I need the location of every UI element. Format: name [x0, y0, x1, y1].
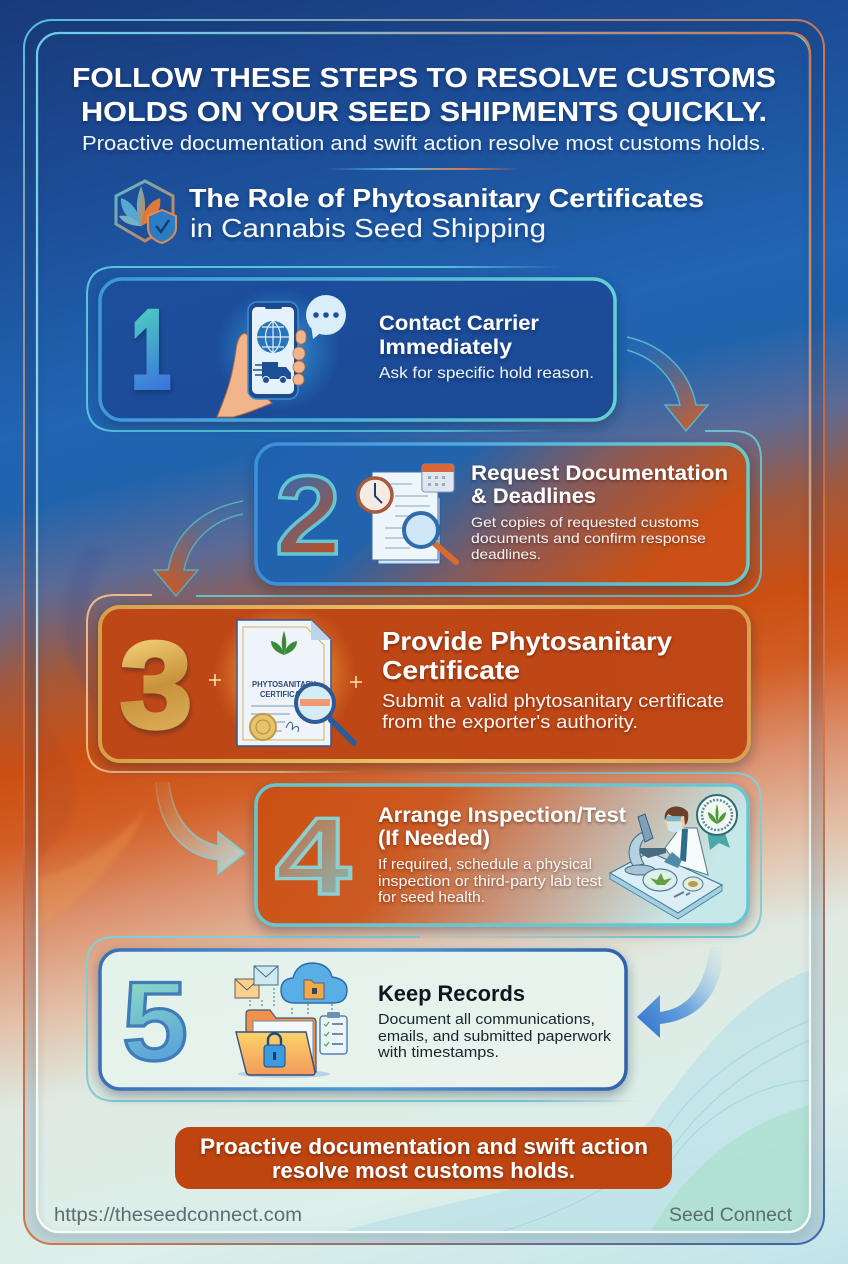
icon: certificate with magnifier: PHYTOSANITARY — [252, 680, 317, 689]
number 1: 1 — [131, 287, 171, 412]
step 2 text: Request Documentation — [471, 462, 728, 485]
step 4 text — [378, 804, 626, 906]
step 4 text: for seed health. — [378, 890, 485, 906]
step 1 — [100, 279, 615, 420]
section heading: in Cannabis Seed Shipping — [190, 213, 546, 243]
step 2 text: documents and confirm response — [471, 530, 706, 546]
section heading: The Role of Phytosanitary Certificates — [189, 183, 704, 213]
arrow: step 4 to 5 — [637, 947, 722, 1038]
callout — [175, 1127, 672, 1189]
callout: resolve most customs holds. — [272, 1158, 575, 1183]
arrow: step 2 to 3 — [154, 501, 243, 596]
step 5 text: Keep Records — [378, 981, 525, 1006]
step 3 text: Certificate — [382, 655, 520, 685]
step 1 text: Immediately — [379, 336, 512, 359]
arrow: step 1 to 2 — [627, 337, 708, 431]
card 3 — [100, 607, 749, 761]
background waves — [38, 545, 810, 1232]
step 3 text — [382, 626, 724, 732]
icon: certificate with magnifier — [209, 603, 362, 747]
title: FOLLOW THESE STEPS TO RESOLVE CUSTOMS — [72, 62, 776, 93]
step 5 — [100, 950, 626, 1089]
subtitle: Proactive documentation and swift action resolve most customs holds. — [82, 133, 766, 155]
step 5 text: Document all communications, — [378, 1012, 595, 1028]
icon: lab scientist — [610, 795, 737, 919]
callout: Proactive documentation and swift action — [200, 1134, 648, 1159]
step 5 text: emails, and submitted paperwork — [378, 1029, 612, 1045]
step 4 text: inspection or third-party lab test — [378, 874, 602, 890]
step 2 text — [471, 462, 728, 562]
footer url: https://theseedconnect.com — [54, 1205, 302, 1226]
step 4 text: Arrange Inspection/Test — [378, 804, 626, 827]
step 2 text: Get copies of requested customs — [471, 514, 699, 530]
number 5: 5 — [122, 959, 188, 1084]
step 3 — [100, 603, 749, 761]
number 4: 4 — [275, 795, 351, 918]
step 3 text: Provide Phytosanitary — [382, 626, 673, 656]
step 3 text: from the exporter's authority. — [382, 712, 638, 732]
icon: shield with leaf — [116, 181, 176, 243]
card 4 — [256, 785, 748, 925]
step 4 text: (If Needed) — [378, 827, 490, 850]
step outlines — [87, 267, 761, 1101]
step 2 text: & Deadlines — [471, 485, 596, 508]
step 2 text: deadlines. — [471, 546, 541, 562]
icon: certificate with magnifier: CERTIFICATE — [260, 690, 310, 699]
card 1 — [100, 279, 615, 420]
step 1 text — [379, 312, 594, 382]
step 1 text: Contact Carrier — [379, 312, 539, 335]
icon: documents, clock, calendar, magnifier — [358, 464, 456, 564]
card 2 — [256, 444, 748, 584]
step 5 text — [377, 981, 612, 1061]
number 2: 2 — [275, 453, 341, 578]
step 3 text: Submit a valid phytosanitary certificate — [382, 691, 724, 711]
step 2 — [256, 444, 748, 584]
step 5 text: with timestamps. — [377, 1045, 499, 1061]
title — [72, 62, 776, 127]
footer brand: Seed Connect — [669, 1205, 793, 1226]
title: HOLDS ON YOUR SEED SHIPMENTS QUICKLY. — [81, 96, 767, 127]
step 4 text: If required, schedule a physical — [378, 857, 592, 873]
number 3: 3 — [120, 617, 192, 753]
section heading — [189, 183, 704, 243]
icon: phone and hand — [216, 288, 346, 417]
step 4 — [256, 785, 748, 925]
step 1 text: Ask for specific hold reason. — [379, 365, 594, 382]
arrow: step 3 to 4 — [156, 782, 245, 874]
card 5 — [100, 950, 626, 1089]
icon: folder, cloud, mail and checklist — [235, 963, 347, 1078]
